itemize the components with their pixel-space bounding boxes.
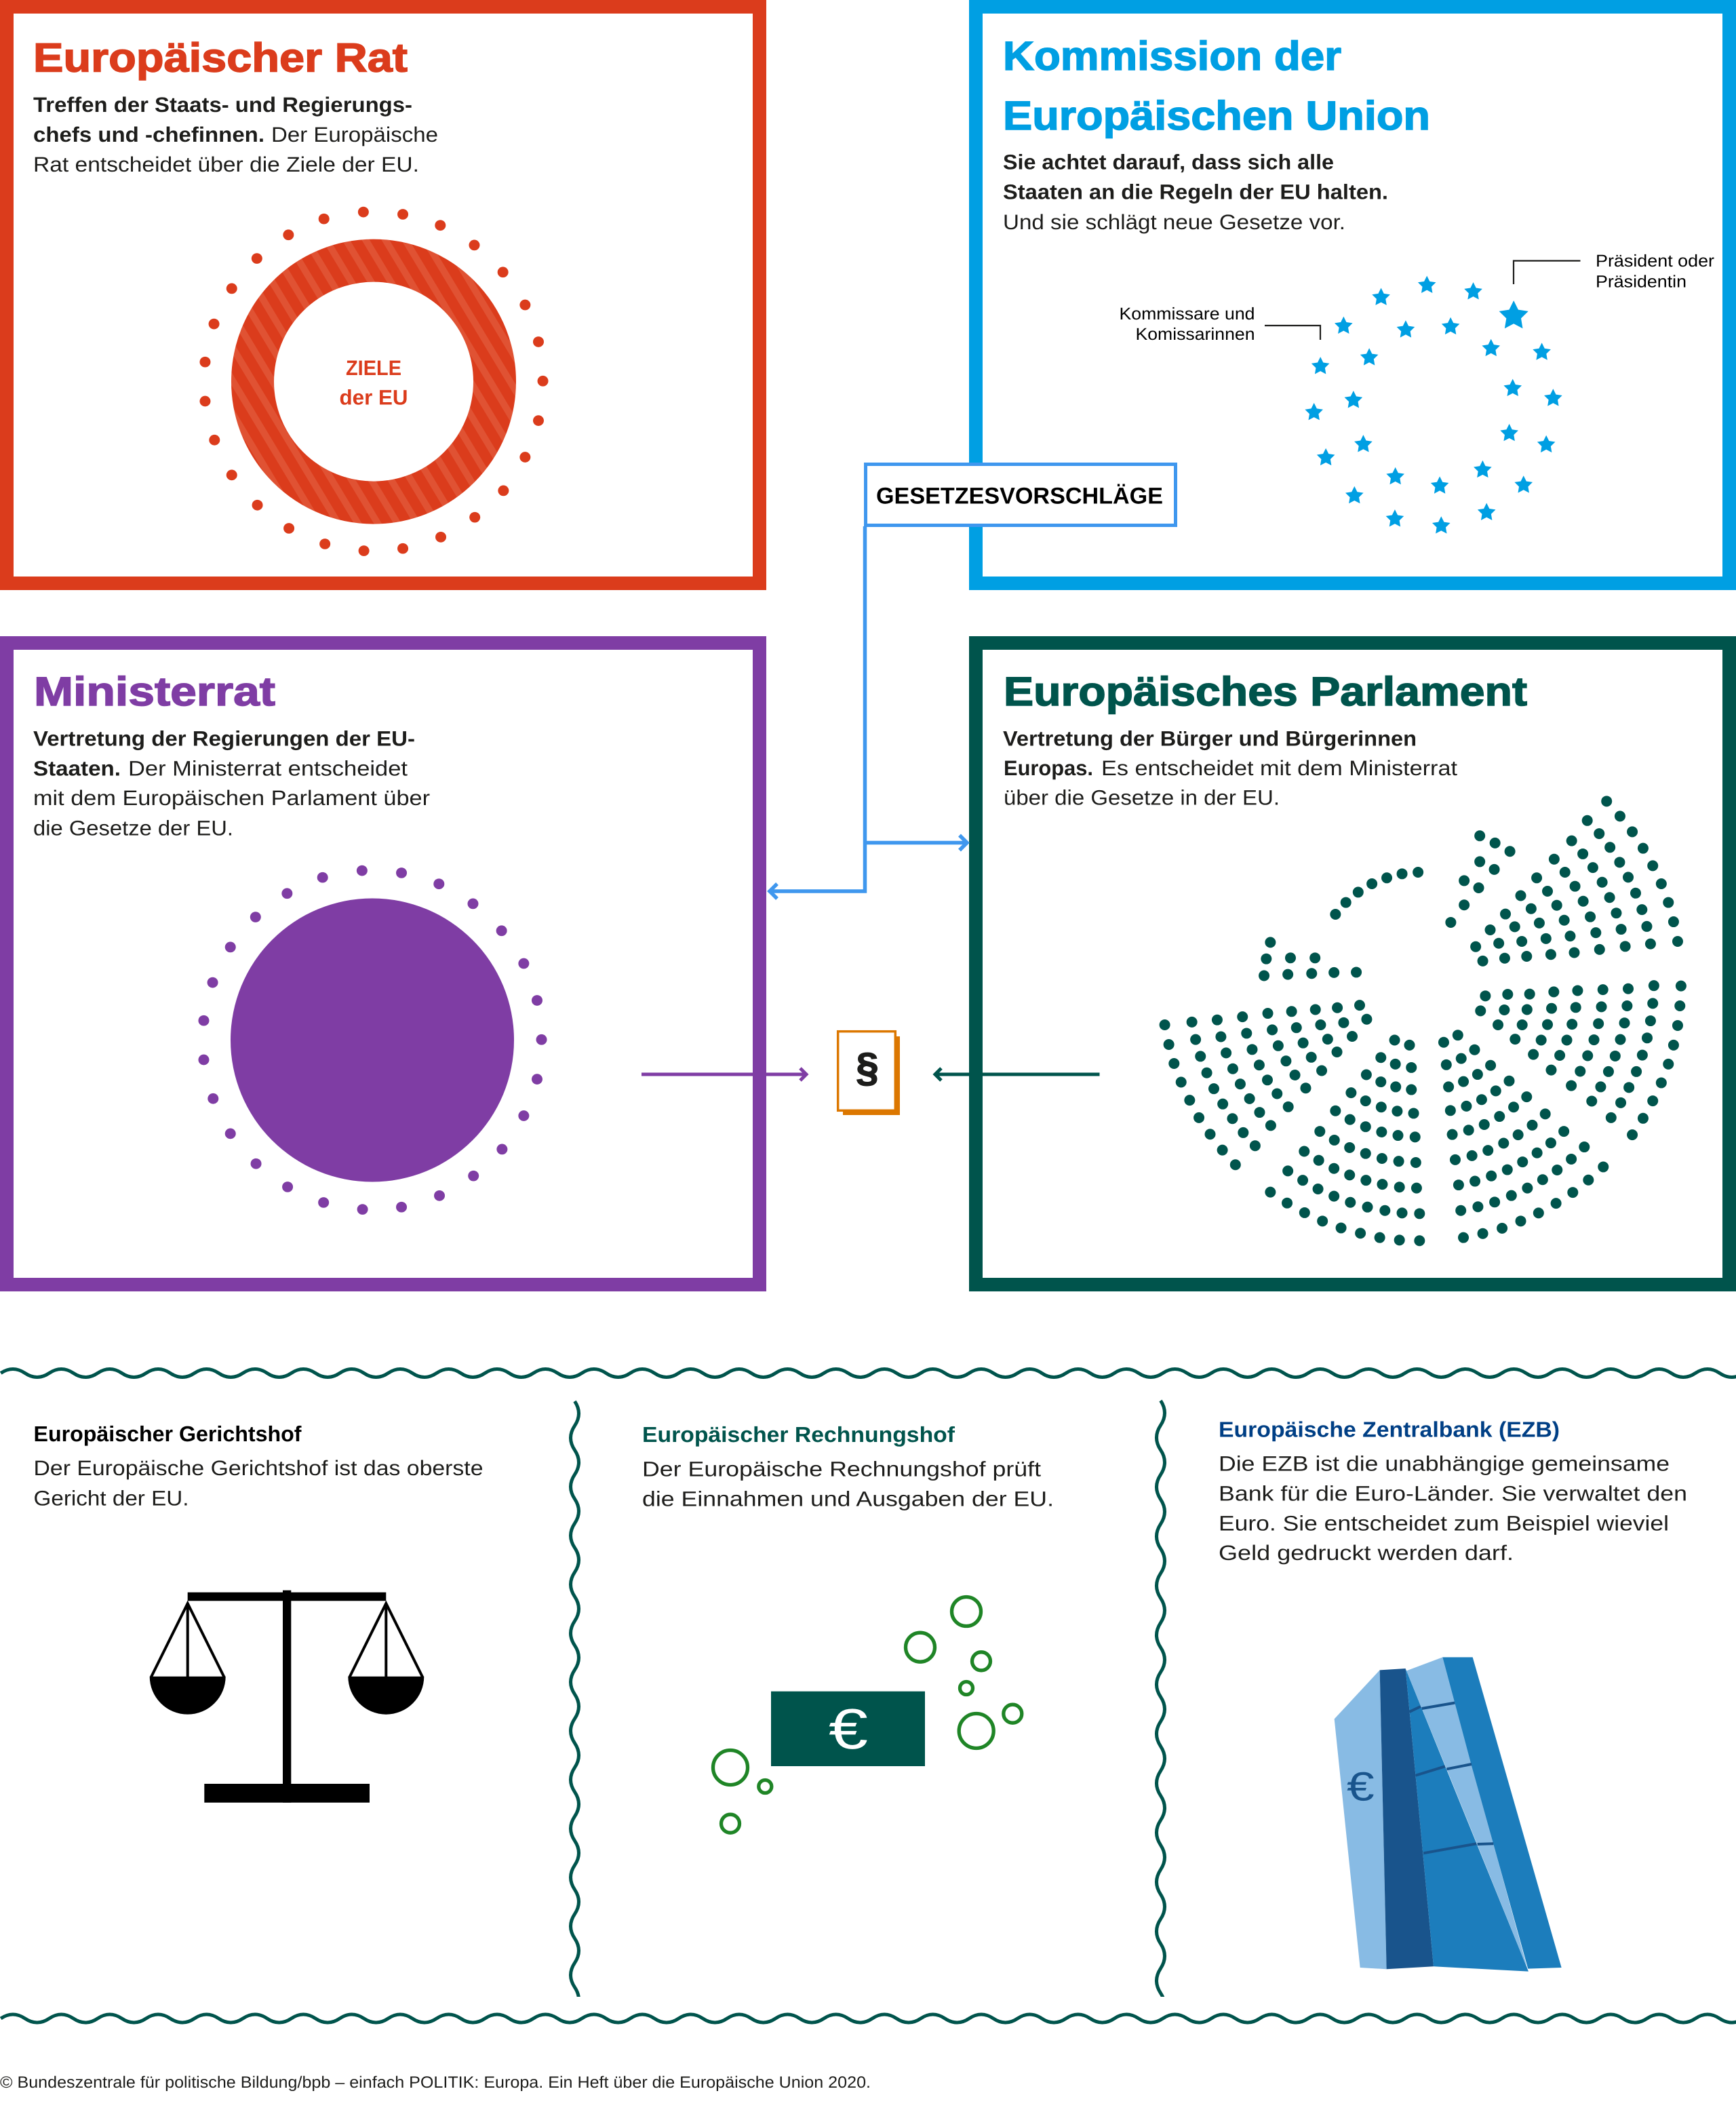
text block: Kommission description: Staaten an die Regeln der EU halten. bbox=[1003, 180, 1388, 203]
text block: Parlament description bbox=[1003, 726, 1457, 810]
chart: goals ring with member dots bbox=[199, 207, 549, 556]
heading: Europäischer Gerichtshof: Europäischer Gerichtshof bbox=[34, 1422, 302, 1446]
text block: Parlament description: Europas. bbox=[1004, 756, 1093, 780]
icon: law document with paragraph sign: § bbox=[856, 1045, 879, 1090]
heading: Europäische Zentralbank (EZB): Europäische Zentralbank (EZB) bbox=[1219, 1417, 1560, 1441]
heading: Kommission der Europäischen Union: Kommission der bbox=[1003, 33, 1341, 79]
heading: Europäischer Rat: Europäischer Rat bbox=[33, 35, 408, 80]
callout: Präsident oder Präsidentin: Präsidentin bbox=[1596, 273, 1686, 292]
text block: EZB description: Bank für die Euro-Länder. Sie verwaltet den bbox=[1219, 1481, 1687, 1505]
text block: EZB description: Die EZB ist die unabhängige gemeinsame bbox=[1219, 1451, 1670, 1475]
text block: EZB description: Geld gedruckt werden darf. bbox=[1219, 1541, 1514, 1565]
chart: council disc with member dots bbox=[198, 865, 547, 1215]
chart: goals ring with member dots: der EU bbox=[339, 385, 408, 410]
section: Europäischer Gerichtshof bbox=[34, 1422, 483, 1803]
text block: Rechnungshof description: Der Europäische Rechnungshof prüft bbox=[642, 1457, 1041, 1481]
divider: top wave bbox=[1, 1369, 1736, 1377]
text block: Kommission description: Und sie schlägt neue Gesetze vor. bbox=[1003, 210, 1345, 234]
label box: Gesetzesvorschläge: GESETZESVORSCHLÄGE bbox=[876, 483, 1163, 509]
text block: Gerichtshof description: Der Europäische Gerichtshof ist das oberste bbox=[34, 1456, 483, 1480]
text block: Kommission description: Sie achtet darauf, dass sich alle bbox=[1003, 151, 1334, 174]
icon: euro banknote with bubbles bbox=[713, 1597, 1022, 1833]
text block: Kommission description bbox=[1003, 151, 1388, 234]
footer: copyright note: © Bundeszentrale für politische Bildung/bpb – einfach POLITIK: Europa. Ein Heft über die Europäische Union 2020. bbox=[0, 2073, 871, 2092]
text block: Ministerrat description: mit dem Europäischen Parlament über bbox=[33, 786, 430, 810]
divider: vertical waves bbox=[571, 1401, 1165, 2018]
heading: Ministerrat: Ministerrat bbox=[34, 669, 275, 714]
section: Europäische Zentralbank bbox=[1219, 1417, 1687, 1972]
icon: scales of justice bbox=[150, 1591, 424, 1803]
panel: Europäisches Parlament bbox=[976, 643, 1729, 1285]
text block: EZB description bbox=[1219, 1451, 1687, 1565]
callout: Präsident oder Präsidentin bbox=[1514, 252, 1714, 292]
callout: Kommissare und Komissarinnen: Komissarinnen bbox=[1135, 325, 1255, 344]
text block: EZB description: Euro. Sie entscheidet zum Beispiel wieviel bbox=[1219, 1511, 1669, 1535]
arrow: Parlament to law bbox=[935, 1068, 1100, 1080]
text block: Ministerrat description: Staaten. bbox=[33, 756, 121, 780]
heading: Europäischer Rechnungshof: Europäischer Rechnungshof bbox=[642, 1422, 955, 1447]
text block: Gerichtshof description: Gericht der EU. bbox=[34, 1486, 189, 1510]
callout: Kommissare und Komissarinnen bbox=[1119, 305, 1320, 344]
icon: law document with paragraph sign bbox=[838, 1032, 900, 1115]
callout: Kommissare und Komissarinnen: Kommissare und bbox=[1119, 305, 1255, 324]
arrow: Ministerrat to law bbox=[642, 1068, 806, 1080]
text block: Rechnungshof description bbox=[642, 1457, 1054, 1510]
heading: Kommission der Europäischen Union bbox=[1003, 33, 1430, 138]
text block: Parlament description: über die Gesetze in der EU. bbox=[1004, 786, 1280, 810]
text block: Ministerrat description: die Gesetze der EU. bbox=[33, 817, 233, 840]
label box: Gesetzesvorschläge bbox=[865, 464, 1176, 525]
icon: euro banknote with bubbles: € bbox=[829, 1697, 868, 1761]
text block: Europäischer Rat description bbox=[33, 93, 438, 176]
icon: ECB tower building: € bbox=[1347, 1763, 1375, 1809]
chart: parliament seats dot hemicycle bbox=[1160, 796, 1686, 1246]
text block: Ministerrat description: Der Ministerrat entscheidet bbox=[128, 756, 408, 780]
text block: Europäischer Rat description: chefs und -chefinnen. bbox=[33, 123, 264, 147]
heading: Kommission der Europäischen Union: Europäischen Union bbox=[1003, 93, 1430, 138]
text block: Ministerrat description: Vertretung der Regierungen der EU- bbox=[33, 727, 415, 750]
text block: Ministerrat description bbox=[33, 727, 430, 840]
callout: Präsident oder Präsidentin: Präsident oder bbox=[1596, 252, 1714, 271]
text block: Europäischer Rat description: Treffen der Staats- und Regierungs- bbox=[33, 93, 412, 117]
text block: Rechnungshof description: die Einnahmen und Ausgaben der EU. bbox=[642, 1487, 1054, 1510]
chart: goals ring with member dots: ZIELE bbox=[346, 356, 401, 380]
text block: Parlament description: Es entscheidet mit dem Ministerrat bbox=[1101, 756, 1457, 780]
text block: Europäischer Rat description: Rat entscheidet über die Ziele der EU. bbox=[33, 153, 419, 176]
heading: Europäisches Parlament: Europäisches Parlament bbox=[1004, 669, 1527, 714]
text block: Europäischer Rat description: Der Europäische bbox=[271, 123, 438, 147]
panel: Europäischer Rat bbox=[7, 7, 760, 583]
divider: bottom wave bbox=[1, 2014, 1736, 2023]
arrow: Gesetzesvorschläge connector to Ministerrat and Parlament bbox=[770, 526, 967, 899]
panel: Ministerrat bbox=[7, 643, 760, 1285]
section: Europäischer Rechnungshof bbox=[642, 1422, 1054, 1833]
chart: ring of commissioner stars bbox=[1305, 276, 1562, 534]
text block: Parlament description: Vertretung der Bürger und Bürgerinnen bbox=[1003, 726, 1417, 750]
text block: Gerichtshof description bbox=[34, 1456, 483, 1510]
panel: Kommission der Europäischen Union bbox=[976, 7, 1729, 583]
icon: ECB tower building bbox=[1335, 1657, 1562, 1972]
